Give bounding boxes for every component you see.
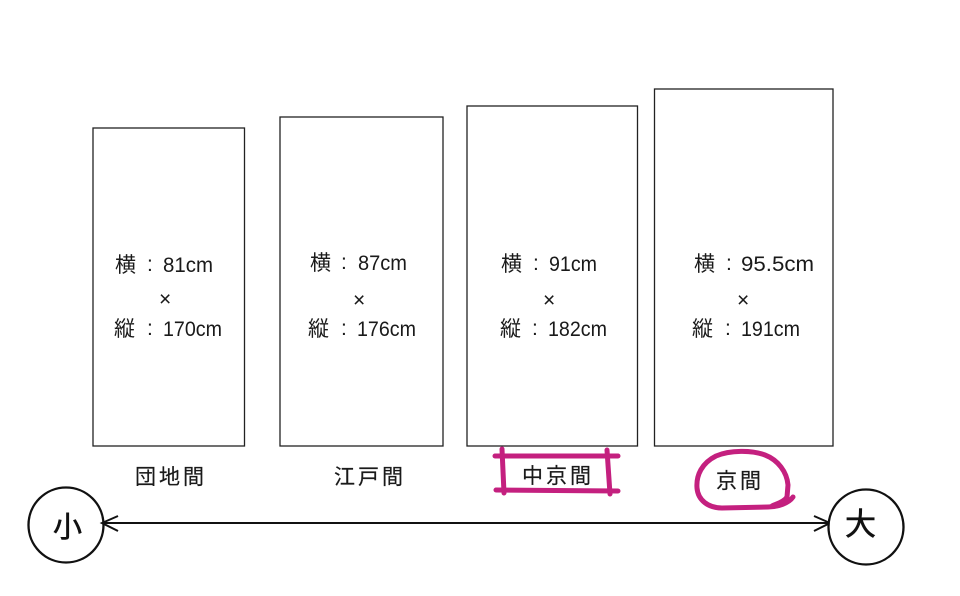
text: 団地間 dimensions: 横 [115,254,136,277]
highlight: 京間 hand-drawn circle [697,451,793,508]
arrow: size scale small to large [102,516,830,531]
text: 江戸間 dimensions [308,251,416,341]
text: 団地間 dimensions: 170cm [163,318,222,341]
text: 団地間 dimensions: : [147,253,153,276]
text: 江戸間 dimensions: : [341,251,347,274]
text: 中京間 dimensions: : [533,252,539,275]
icon: large circle 大: 大 [845,507,876,542]
text: 京間 dimensions: 横 [694,253,715,276]
label: 京間: 京間 [716,470,764,493]
text: 団地間 dimensions: : [147,317,153,340]
text: 中京間 dimensions: : [532,317,538,340]
text: 団地間 dimensions: 81cm [163,254,213,277]
text: 京間 dimensions: 縦 [692,318,713,341]
panel: 中京間 mat [467,106,638,446]
panel: 団地間 mat [93,128,244,446]
text: 江戸間 dimensions: 縦 [308,318,329,341]
icon: small circle 小: 小 [53,512,82,544]
text: 中京間 dimensions: 横 [501,253,522,276]
icon: small circle 小 [28,488,104,562]
text: 京間 dimensions: 191cm [741,318,800,341]
text: 京間 dimensions: × [737,289,749,312]
label: 団地間: 団地間 [135,466,207,489]
text: 江戸間 dimensions: × [353,289,365,312]
text: 団地間 dimensions: 縦 [114,318,135,341]
text: 中京間 dimensions: × [543,289,555,312]
label: 中京間: 中京間 [522,465,594,488]
text: 京間 dimensions [692,252,814,341]
text: 団地間 dimensions: × [159,288,171,311]
text: 中京間 dimensions [500,252,607,341]
panel: 京間 mat [654,89,833,446]
text: 京間 dimensions: 95.5cm [741,253,814,276]
text: 中京間 dimensions: 縦 [500,318,521,341]
label: 江戸間: 江戸間 [334,466,406,489]
text: 団地間 dimensions [114,253,222,341]
text: 京間 dimensions: : [726,252,732,275]
panel: 江戸間 mat [280,117,443,446]
text: 中京間 dimensions: 91cm [549,253,597,276]
text: 江戸間 dimensions: 87cm [358,252,407,275]
text: 江戸間 dimensions: 176cm [357,318,416,341]
text: 江戸間 dimensions: 横 [310,252,331,275]
text: 江戸間 dimensions: : [341,317,347,340]
icon: large circle 大 [828,490,904,564]
text: 中京間 dimensions: 182cm [548,318,607,341]
highlight: 中京間 hand-drawn frame [495,449,618,494]
text: 京間 dimensions: : [725,317,731,340]
